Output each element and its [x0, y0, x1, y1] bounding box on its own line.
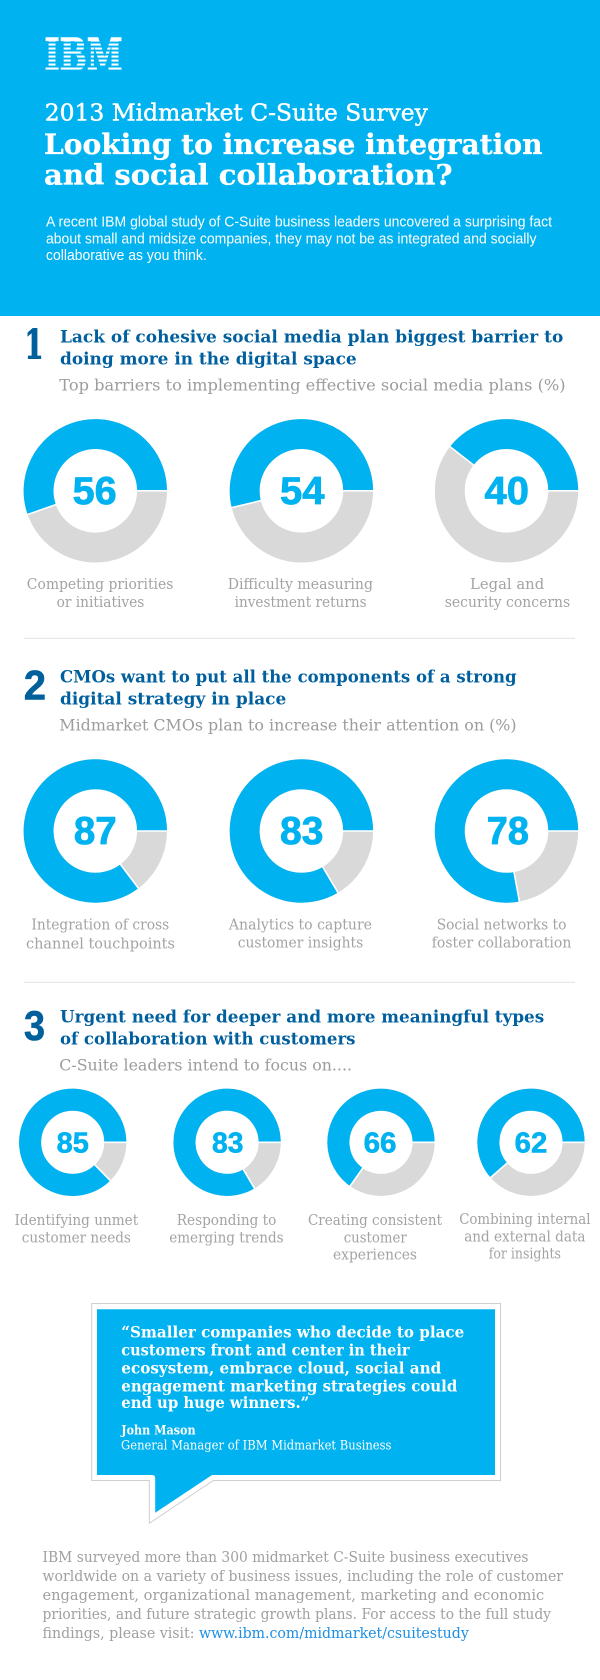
donut: 66 consistent experiences: Creating consistent: [308, 1213, 442, 1229]
quote text: ecosystem, embrace cloud, social and: [121, 1358, 441, 1377]
donut: 83 emerging trends: emerging trends: [169, 1230, 284, 1246]
survey name: 2013 Midmarket C-Suite Survey: [45, 101, 428, 127]
donut: 40 legal and security: Legal and: [470, 577, 544, 593]
footer text: engagement, organizational management, marketing and economic: [42, 1586, 544, 1604]
donut: 40 legal and security: [427, 411, 586, 611]
quote text: customers front and center in their: [121, 1340, 410, 1359]
quote text: end up huge winners.”: [121, 1393, 309, 1412]
donut: 56 competing priorities: Competing priorities: [27, 577, 173, 593]
section 3 subtitle: C-Suite leaders intend to focus on....: [59, 1056, 352, 1075]
donut: 85 unmet needs: customer needs: [22, 1230, 131, 1246]
donut: 78 social networks: [432, 765, 580, 951]
donut: 85 unmet needs: 85: [57, 1128, 89, 1160]
section 2 subtitle: Midmarket CMOs plan to increase their attention on (%): [59, 716, 517, 735]
quote text: engagement marketing strategies could: [121, 1376, 457, 1395]
donut: 62 combining data: Combining internal: [459, 1212, 591, 1228]
donut: 87 integration: 87: [74, 810, 117, 853]
number 1: 1: [24, 321, 44, 368]
footer text: IBM surveyed more than 300 midmarket C-Suite business executives: [42, 1548, 528, 1566]
section 2 heading: digital strategy in place: [60, 689, 286, 709]
intro paragraph: [46, 215, 552, 264]
section 1: [23, 321, 586, 611]
donut: 83 analytics: customer insights: [238, 935, 363, 951]
main title: and social collaboration?: [44, 158, 452, 191]
section 1 subtitle: Top barriers to implementing effective social media plans (%): [59, 376, 566, 395]
donut: 78 social networks: foster collaboration: [432, 935, 571, 951]
section 3: [12, 1002, 591, 1264]
donut: 85 unmet needs: [12, 1082, 138, 1246]
footer text: [42, 1548, 564, 1642]
donut: 56 competing priorities: 56: [73, 470, 117, 513]
section 3 heading: of collaboration with customers: [60, 1029, 356, 1049]
main title: [44, 128, 542, 191]
donut: 87 integration: [16, 752, 175, 952]
footer text: worldwide on a variety of business issues, including the role of customer: [42, 1567, 564, 1585]
donut: 54 difficulty measuring: investment returns: [235, 595, 367, 611]
donut: 62 combining data: and external data: [464, 1229, 586, 1245]
donut: 66 consistent experiences: 66: [364, 1128, 396, 1160]
donut: 66 consistent experiences: [308, 1083, 442, 1264]
donut: 56 competing priorities: or initiatives: [57, 595, 144, 611]
header panel: [0, 0, 600, 316]
callout: quote speech bubble: [92, 1304, 500, 1523]
footer text: www.ibm.com/midmarket/csuitestudy: [199, 1624, 469, 1642]
donut: 87 integration: Integration of cross: [31, 917, 169, 933]
donut: 54 difficulty measuring: 54: [280, 470, 325, 513]
donut: 66 consistent experiences: customer: [344, 1230, 407, 1246]
donut: 83 analytics: Analytics to capture: [228, 917, 372, 933]
quote attribution: John Mason: [120, 1423, 196, 1438]
donut: 83 emerging trends: [169, 1084, 286, 1246]
donut: 85 unmet needs: Identifying unmet: [14, 1213, 138, 1229]
donut: 40 legal and security: security concerns: [445, 595, 570, 611]
intro paragraph: A recent IBM global study of C-Suite business leaders uncovered a surprising fact: [46, 215, 552, 231]
donut: 78 social networks: 78: [487, 810, 529, 853]
donut: 83 emerging trends: 83: [212, 1128, 243, 1160]
section 1 heading: [60, 328, 563, 369]
donut: 56 competing priorities: [23, 418, 173, 611]
section 1 heading: doing more in the digital space: [60, 349, 357, 369]
donut: 54 difficulty measuring: Difficulty measuring: [228, 577, 373, 593]
intro paragraph: collaborative as you think.: [46, 248, 207, 264]
section 2: [16, 661, 580, 952]
donut: 66 consistent experiences: experiences: [333, 1248, 417, 1264]
donut: 78 social networks: Social networks to: [437, 917, 566, 933]
section 2 heading: CMOs want to put all the components of a strong: [60, 668, 517, 688]
quote attribution: General Manager of IBM Midmarket Business: [121, 1438, 392, 1453]
donut: 83 emerging trends: Responding to: [177, 1213, 276, 1229]
donut: 62 combining data: [459, 1082, 591, 1263]
icon: IBM logo: IBM: [44, 30, 122, 81]
intro paragraph: about small and midsize companies, they may not be as integrated and socially: [46, 231, 537, 247]
main title: Looking to increase integration: [44, 128, 542, 161]
donut: 83 analytics: 83: [280, 810, 323, 853]
donut: 54 difficulty measuring: [228, 422, 375, 611]
section 3 heading: Urgent need for deeper and more meaningful types: [60, 1008, 544, 1028]
donut: 83 analytics: [224, 753, 379, 951]
donut: 87 integration: channel touchpoints: [26, 936, 175, 952]
donut: 62 combining data: for insights: [489, 1247, 561, 1263]
donut: 40 legal and security: 40: [484, 470, 529, 513]
quote text: [121, 1322, 464, 1412]
section 3 heading: [60, 1008, 544, 1049]
quote text: “Smaller companies who decide to place: [121, 1322, 464, 1341]
donut: 62 combining data: 62: [515, 1128, 547, 1160]
footer text: priorities, and future strategic growth plans. For access to the full study: [42, 1605, 551, 1623]
number 3: 3: [24, 1002, 45, 1049]
number 2: 2: [24, 661, 46, 708]
section 1 heading: Lack of cohesive social media plan biggest barrier to: [60, 328, 563, 348]
section 2 heading: [60, 668, 517, 709]
footer text: findings, please visit:: [42, 1624, 194, 1642]
quote attribution: [120, 1423, 392, 1453]
